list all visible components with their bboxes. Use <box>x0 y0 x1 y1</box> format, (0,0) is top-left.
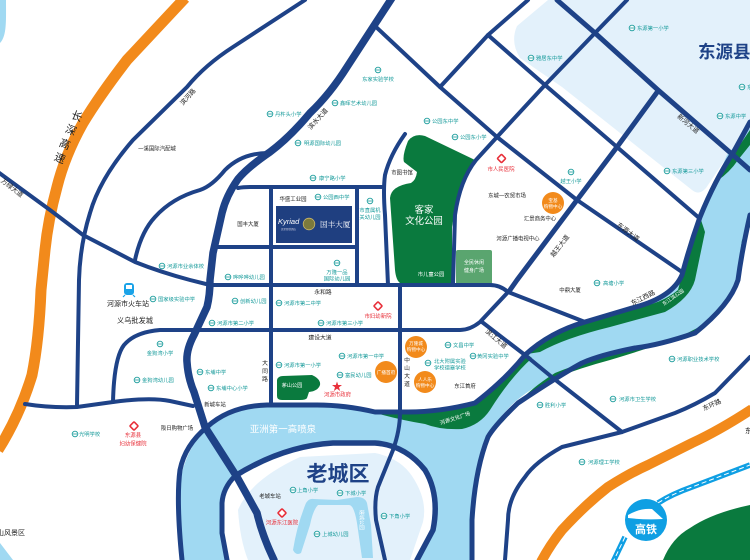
map labels: place names: 大 <box>262 359 268 367</box>
Maoshan park <box>277 375 320 400</box>
school labels: 关幼儿园 <box>359 213 381 221</box>
district title: Dongyuan: 东源县 <box>698 42 750 62</box>
school labels: 学校德塞学校 <box>434 364 466 372</box>
white park labels: 文化公园 <box>405 215 443 226</box>
map labels: place names: 义乌批发城 <box>117 316 153 325</box>
green bank: south river strip <box>502 215 750 423</box>
map labels: place names: 老城车站 <box>259 492 281 500</box>
map labels: place names: 中 <box>404 356 410 364</box>
Kyriad hotel panel <box>276 206 352 243</box>
school labels: 河源市第二中学 <box>284 299 321 307</box>
map labels: place names: 同 <box>262 368 268 375</box>
school labels: 东源第一小学 <box>637 24 669 32</box>
school labels: 上角小学 <box>297 486 318 494</box>
rotated road labels: 越王大道 <box>548 232 571 259</box>
map labels: place names: 国丰大厦 <box>237 220 259 228</box>
expressway label: 速 <box>52 150 67 167</box>
high-speed rail line <box>613 465 750 560</box>
rotated road labels: 东源大道 <box>615 220 642 243</box>
expressway label <box>52 108 84 167</box>
rotated road labels: 东环路 <box>701 396 723 413</box>
map labels: place names: 中鼎大厦 <box>559 286 581 294</box>
white park labels: 河源文化广场 <box>439 409 471 427</box>
school labels: 上城幼儿园 <box>322 530 348 538</box>
orange mall badges: 购物中心 <box>544 203 563 210</box>
map labels: place names: 东江首府 <box>454 382 476 390</box>
school labels: 黄冈实验中学 <box>477 352 509 360</box>
school labels: 金狗湾小学 <box>147 349 173 357</box>
map labels: place names: 建设大道 <box>308 334 332 342</box>
orange mall badges <box>375 192 564 393</box>
green bank: Heyuan cultural square <box>372 354 532 429</box>
school labels: 河源市第一中学 <box>347 352 384 360</box>
bottom-left water <box>0 543 13 560</box>
icon: high-speed rail badge <box>625 499 667 541</box>
school labels: 河源市业余体校 <box>167 262 205 270</box>
expressway east (orange) <box>541 409 750 560</box>
white park labels: 东江滨公园 <box>661 287 686 307</box>
school labels: 金狗湾幼儿园 <box>142 376 174 384</box>
school labels: 河源市第一小学 <box>284 361 321 369</box>
map labels: place names: 路 <box>262 375 268 383</box>
orange mall badges: 万隆城 <box>409 340 423 347</box>
old town island <box>221 443 435 560</box>
school labels: 下城小学 <box>345 489 366 497</box>
school labels: 创新幼儿园 <box>240 297 266 305</box>
school labels: 河源理工学校 <box>588 458 620 466</box>
school labels: 下角小学 <box>389 512 410 520</box>
white park labels: 茅山公园 <box>282 381 302 389</box>
white park labels <box>250 204 686 530</box>
rotated road labels: 滨河路 <box>178 86 198 107</box>
rotated road labels: 东江西路 <box>629 287 657 307</box>
school labels: 东家实验学校 <box>362 75 395 83</box>
orange mall badges: 购物中心 <box>407 346 426 353</box>
white park labels: 亚洲第一高喷泉 <box>250 424 317 434</box>
map labels: place names: 一溪国际汽配城 <box>138 144 176 152</box>
orange mall badges: 广播首府 <box>377 369 396 376</box>
rotated road labels: 滨江大道 <box>483 327 510 351</box>
school labels: 河源市第二小学 <box>217 319 254 327</box>
map labels: place names <box>0 144 581 537</box>
icon: high-speed rail badge: 高铁 <box>635 522 657 536</box>
hospitals and government markers: 市人民医院 <box>488 165 515 173</box>
school labels: 公园西中学 <box>323 193 350 201</box>
map labels: place names: 新城车站 <box>204 400 226 408</box>
rotated road labels <box>0 86 723 413</box>
river <box>178 128 750 560</box>
hospitals and government markers: 妇幼保健院 <box>120 440 147 448</box>
school labels: 公园东中学 <box>432 117 458 125</box>
orange mall badges: 宝基 <box>548 197 558 203</box>
expressway label: 深 <box>63 122 78 139</box>
green bank: north river strip <box>527 217 705 354</box>
school labels: 胜利小学 <box>545 401 566 409</box>
old town inner water <box>293 497 373 558</box>
map labels: place names: 河源广播电视中心 <box>496 234 540 242</box>
map labels: place names: 华盛工业园 <box>280 195 306 203</box>
school labels: 东埔中学 <box>205 368 226 376</box>
white park labels: 槎城公园 <box>358 510 365 530</box>
school labels: 河源市第三小学 <box>326 319 363 327</box>
orange mall badges: 购物中心 <box>416 382 435 389</box>
hospitals and government markers <box>120 154 515 526</box>
expressway label: 高 <box>57 135 73 153</box>
school labels: 河源市卫生学校 <box>619 395 657 403</box>
school labels: 东源中学 <box>725 112 746 120</box>
map labels: place names: 汇景商务中心 <box>524 214 557 222</box>
school labels: 东埔中心小学 <box>216 384 248 392</box>
Kejia cultural park <box>390 135 475 283</box>
top-left water <box>0 0 6 43</box>
school labels: 万隆一品 <box>326 268 348 276</box>
school labels: 东源第三小学 <box>672 167 704 175</box>
map labels: place names: 河源市火车站 <box>107 299 149 308</box>
bottom-right forest <box>663 505 750 560</box>
white park labels: 客家 <box>415 204 434 215</box>
map labels: place names: 阪日购物广场 <box>161 424 194 432</box>
icon: train <box>123 283 135 297</box>
expressway label: 长 <box>69 108 84 125</box>
hospitals and government markers: 河源市政府 <box>324 390 352 398</box>
school labels: 明源国际幼儿园 <box>304 139 341 147</box>
orange mall badges: 人人乐 <box>418 376 432 382</box>
school labels: 北大附属实验 <box>434 357 466 365</box>
school labels: 雅居东中学 <box>536 54 562 62</box>
school labels: 康宁路小学 <box>319 174 346 182</box>
old town district tint <box>238 453 424 560</box>
school labels: 高塘小学 <box>603 279 624 287</box>
school labels: 文昌中学 <box>453 341 474 349</box>
Dongyuan county district area <box>514 0 750 193</box>
map labels: place names: 市图书馆 <box>391 168 413 176</box>
school labels: 光明学校 <box>79 430 101 438</box>
school labels: 市直属机 <box>359 206 381 214</box>
district title: old town: 老城区 <box>306 463 370 486</box>
rotated road labels: 滨水大道 <box>306 106 330 131</box>
expressway west (orange) <box>0 0 185 450</box>
school labels: 公园东小学 <box>460 133 486 141</box>
school labels: 哗哗哗幼儿园 <box>233 273 265 281</box>
Kyriad hotel panel: 国丰大厦 <box>320 219 351 230</box>
white park labels: 市儿童公园 <box>418 270 444 278</box>
map labels: place names: 大 <box>404 372 410 380</box>
white park labels: 健身广场 <box>464 267 484 274</box>
school labels: 河源职业技术学校 <box>677 355 720 363</box>
school labels: 丹杵头小学 <box>275 110 302 118</box>
hospitals and government markers: 河源东江医院 <box>266 518 299 526</box>
Kyriad hotel panel: 凯里亚德酒店 <box>281 227 297 231</box>
school labels: 越王小学 <box>560 177 582 185</box>
hospitals and government markers: 市妇幼新院 <box>365 312 392 320</box>
map labels: place names: 永和路 <box>314 288 332 296</box>
school labels: 国际幼儿园 <box>324 274 350 282</box>
rotated road labels: 新河大道 <box>675 112 702 136</box>
fitness plaza <box>456 250 492 286</box>
hospitals and government markers: 东源县 <box>125 431 142 439</box>
school labels: 鑫晖艺术幼儿园 <box>340 99 377 107</box>
school labels: 富民幼儿园 <box>345 371 372 379</box>
Kyriad hotel panel: Kyriad <box>278 217 300 226</box>
green bank: upper right strip <box>717 130 750 181</box>
rotated road labels: 万绿大道 <box>0 176 26 199</box>
white park labels: 全民休闲 <box>464 259 484 266</box>
map labels: place names: 道 <box>404 380 410 388</box>
school labels: 国家级实验中学 <box>158 295 195 303</box>
map labels: place names: 东城一农贸市场 <box>488 192 526 200</box>
map labels: place names: 山 <box>404 364 410 372</box>
